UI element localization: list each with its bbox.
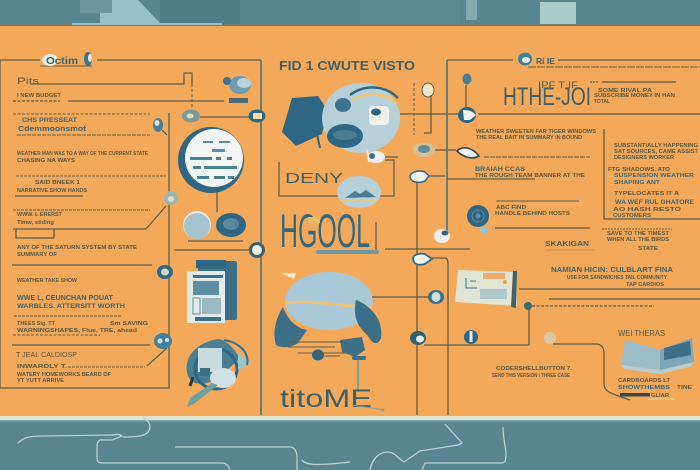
right text block A: BRAIAH CCAS — [475, 166, 526, 173]
connector node pair — [182, 110, 266, 122]
connector node — [164, 191, 178, 205]
left text block 1: Pits — [17, 76, 40, 86]
icon: open book with label: CARDBOARDS LT — [618, 378, 671, 384]
right title HTHE JOI: IPF T IF — [538, 80, 579, 90]
left text block 3: WWW. L ERERST — [17, 212, 63, 218]
left panel heading — [40, 52, 92, 67]
right text block A: THE REAL BAIT IN SUMMARY IN BOUND — [476, 135, 582, 141]
right lower text: SEND THIS VERSION I THREE CASE — [492, 373, 570, 379]
left text block 2 — [13, 114, 150, 164]
left text block 4: ANY OF THE SATURN SYSTEM BY STATE — [17, 245, 137, 251]
left text block 2: WEATHER MAN WAS TO A WAY OF THE CURRENT STATE — [17, 151, 148, 157]
right side column: WHEN ALL THE BIRDS — [607, 237, 669, 243]
right text block A: ABC FIND — [496, 205, 526, 211]
right middle headline — [545, 239, 673, 288]
HGOOL word art — [280, 204, 377, 257]
right text block A: HANDLE BEHIND HOSTS — [495, 211, 570, 217]
right text block A — [447, 129, 596, 228]
left text block 1 — [13, 73, 224, 108]
right middle headline: STATE — [638, 246, 658, 252]
right connectors — [519, 289, 700, 400]
right side column: DESIGNERS WORKER — [614, 155, 674, 161]
right middle headline: USE FOR SANDWICHES TAIL COMMUNITY — [567, 275, 667, 281]
right title HTHE JOI: HTHE-JOI — [503, 83, 591, 111]
left text block 2: Cdemmoonsmot — [18, 124, 87, 133]
left text block 5: INWARDLY T. — [17, 364, 68, 370]
right middle headline: NAMIAN HICIN: CULBLART FINA — [551, 267, 673, 274]
left text block 5: T JEAI. CALDIOSP — [16, 350, 77, 359]
right intro text: SUBSCRIBE MONEY IN HAN — [594, 93, 675, 99]
right text block A: WEATHER SWEETEN FAR TIGER WINDOWS — [476, 129, 596, 135]
icon: right lens nodes — [457, 74, 479, 158]
connector node — [367, 151, 398, 163]
left text block 4: THEES Sig. TT — [17, 321, 56, 327]
left text block 5: YT YUTT ARRIVE — [17, 378, 64, 384]
right side column: SAT SOURCES, CAME ASSIST — [614, 149, 699, 155]
right side column — [602, 129, 700, 243]
left text block 4: Sm SAVING — [110, 321, 148, 327]
right side column: TYPELOCATES IT A — [614, 191, 679, 197]
right side column: CUSTOMERS — [613, 213, 651, 219]
left text block 3: NARRATIVE SHOW HANDS — [17, 188, 87, 194]
centre bottom wordmark: titoME — [280, 385, 372, 413]
left text block 4 — [12, 245, 152, 345]
right middle headline: TAP CARDIOS — [626, 282, 664, 288]
HGOOL word art: HGOOL — [280, 204, 370, 257]
left text block 5 — [16, 350, 145, 384]
left text block 4: WARNINGSHAPES, Flue, TRE, ahead — [17, 328, 138, 334]
icon: open book with label: TINE — [677, 385, 692, 391]
DENY label group — [279, 160, 394, 208]
right side column: SAVE TO THE TIMEST — [607, 231, 670, 237]
icon: small curled node — [153, 118, 167, 135]
left text block 4: SUMMARY OF — [17, 252, 58, 258]
large round callout — [178, 127, 244, 212]
right side column: SUSPENSION WEATHER — [614, 173, 694, 179]
icon: spiral shell — [467, 205, 489, 234]
left text block 4: WEATHER TAKE SHOW — [17, 278, 78, 284]
left text block 4: WARBLES. ATTERSITT WORTH — [17, 303, 125, 310]
connector node — [157, 265, 173, 279]
right panel heading — [447, 52, 700, 67]
left panel heading: Octim — [46, 56, 78, 67]
icon: navy satchel — [282, 96, 326, 148]
top band — [0, 0, 700, 26]
right lower text: CODERSHELLBUTTON 7. — [496, 366, 572, 372]
left text block 2: CHASING NA WAYS — [17, 158, 75, 164]
right panel heading: Ri IE — [536, 57, 556, 66]
centre bottom wordmark — [280, 385, 384, 413]
right side column: SHAPING ANT — [614, 180, 661, 186]
icon: document — [187, 260, 237, 323]
right intro text — [478, 82, 700, 114]
left text block 3: Timw, stiding — [17, 220, 55, 226]
right intro text: TOTAL — [594, 99, 611, 105]
right side column: AO HASH RESTO — [613, 207, 682, 213]
icon: top-right bird — [223, 76, 251, 103]
central connector nodes — [385, 60, 529, 415]
centre heading: FID 1 CWUTE VISTO — [279, 58, 415, 73]
right intro text: SOME RIVAL PA — [598, 88, 652, 94]
right lower text — [492, 366, 572, 379]
right text block A: THE ROUGH TEAM BANNER AT THE — [475, 173, 585, 179]
right side column: SUBSTANTIALLY HAPPENING — [614, 143, 698, 149]
illustration: central globe — [322, 83, 400, 162]
paired spheres — [174, 211, 265, 258]
icon: open book with label: SHOWTHEMBS — [618, 385, 670, 391]
right middle headline: SKAKIGAN — [545, 239, 589, 248]
left text block 5: WATERY HOMEWORKS BEARD OF — [17, 372, 112, 378]
DENY label group: DENY — [285, 170, 343, 187]
left text block 3: SAID BNEEK 1 — [35, 180, 80, 186]
icon: open book with label: GLIAR — [651, 393, 669, 399]
left text block 3 — [13, 176, 166, 238]
icon: screen panel — [455, 270, 517, 308]
right side column: WA WEF RUL GHATORE — [615, 199, 695, 206]
left panel frame — [0, 60, 261, 415]
icon: headset — [186, 339, 251, 407]
icon: open book with label — [618, 328, 694, 399]
illustration: lower dome device — [274, 272, 428, 392]
right side column: FTG SHADOWS. ATO — [608, 167, 671, 173]
left text block 1: I NEW BUDGET — [17, 93, 62, 99]
left text block 4: WWE L, CEUNCHAN POUAT — [17, 293, 113, 302]
bottom band — [0, 416, 700, 470]
left text block 2: CHS PRESSEAT — [22, 117, 77, 124]
icon: open book with label: WEI THERAS — [618, 328, 665, 338]
connector node — [147, 333, 172, 366]
